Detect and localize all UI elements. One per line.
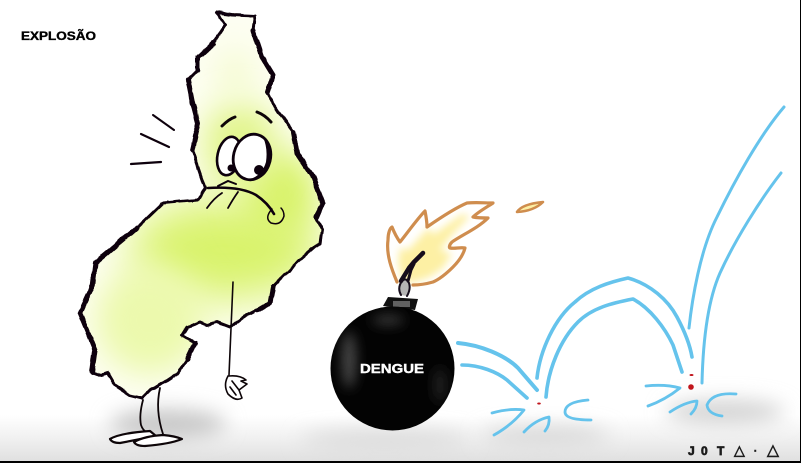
blue bounce trails — [458, 107, 784, 398]
splash one — [492, 400, 591, 435]
signature — [688, 442, 779, 459]
arm and hand — [226, 282, 247, 399]
splash two — [646, 374, 736, 416]
signature: J — [688, 444, 695, 458]
flame spark — [517, 202, 543, 212]
bomb cap — [383, 297, 418, 310]
ground shadows — [0, 400, 801, 461]
signature: · — [754, 446, 757, 456]
map body fill — [82, 14, 322, 396]
flame — [388, 202, 543, 285]
legs and feet — [110, 388, 182, 446]
signature: 0 — [701, 444, 708, 458]
thick outline segments — [80, 30, 323, 372]
signature: △ — [734, 442, 745, 458]
map outline — [80, 13, 323, 398]
bomb label: DENGUE — [360, 361, 424, 376]
map character — [70, 0, 330, 446]
title: EXPLOSÃO — [21, 30, 96, 43]
mouth and wrinkles — [207, 181, 284, 224]
bomb — [330, 253, 454, 430]
signature: △ — [767, 442, 779, 459]
eyes — [214, 130, 276, 184]
signature: T — [717, 444, 725, 458]
motion lines — [131, 115, 174, 164]
bomb ball — [330, 306, 454, 430]
eyebrows — [222, 112, 271, 126]
bomb fuse — [399, 253, 423, 296]
